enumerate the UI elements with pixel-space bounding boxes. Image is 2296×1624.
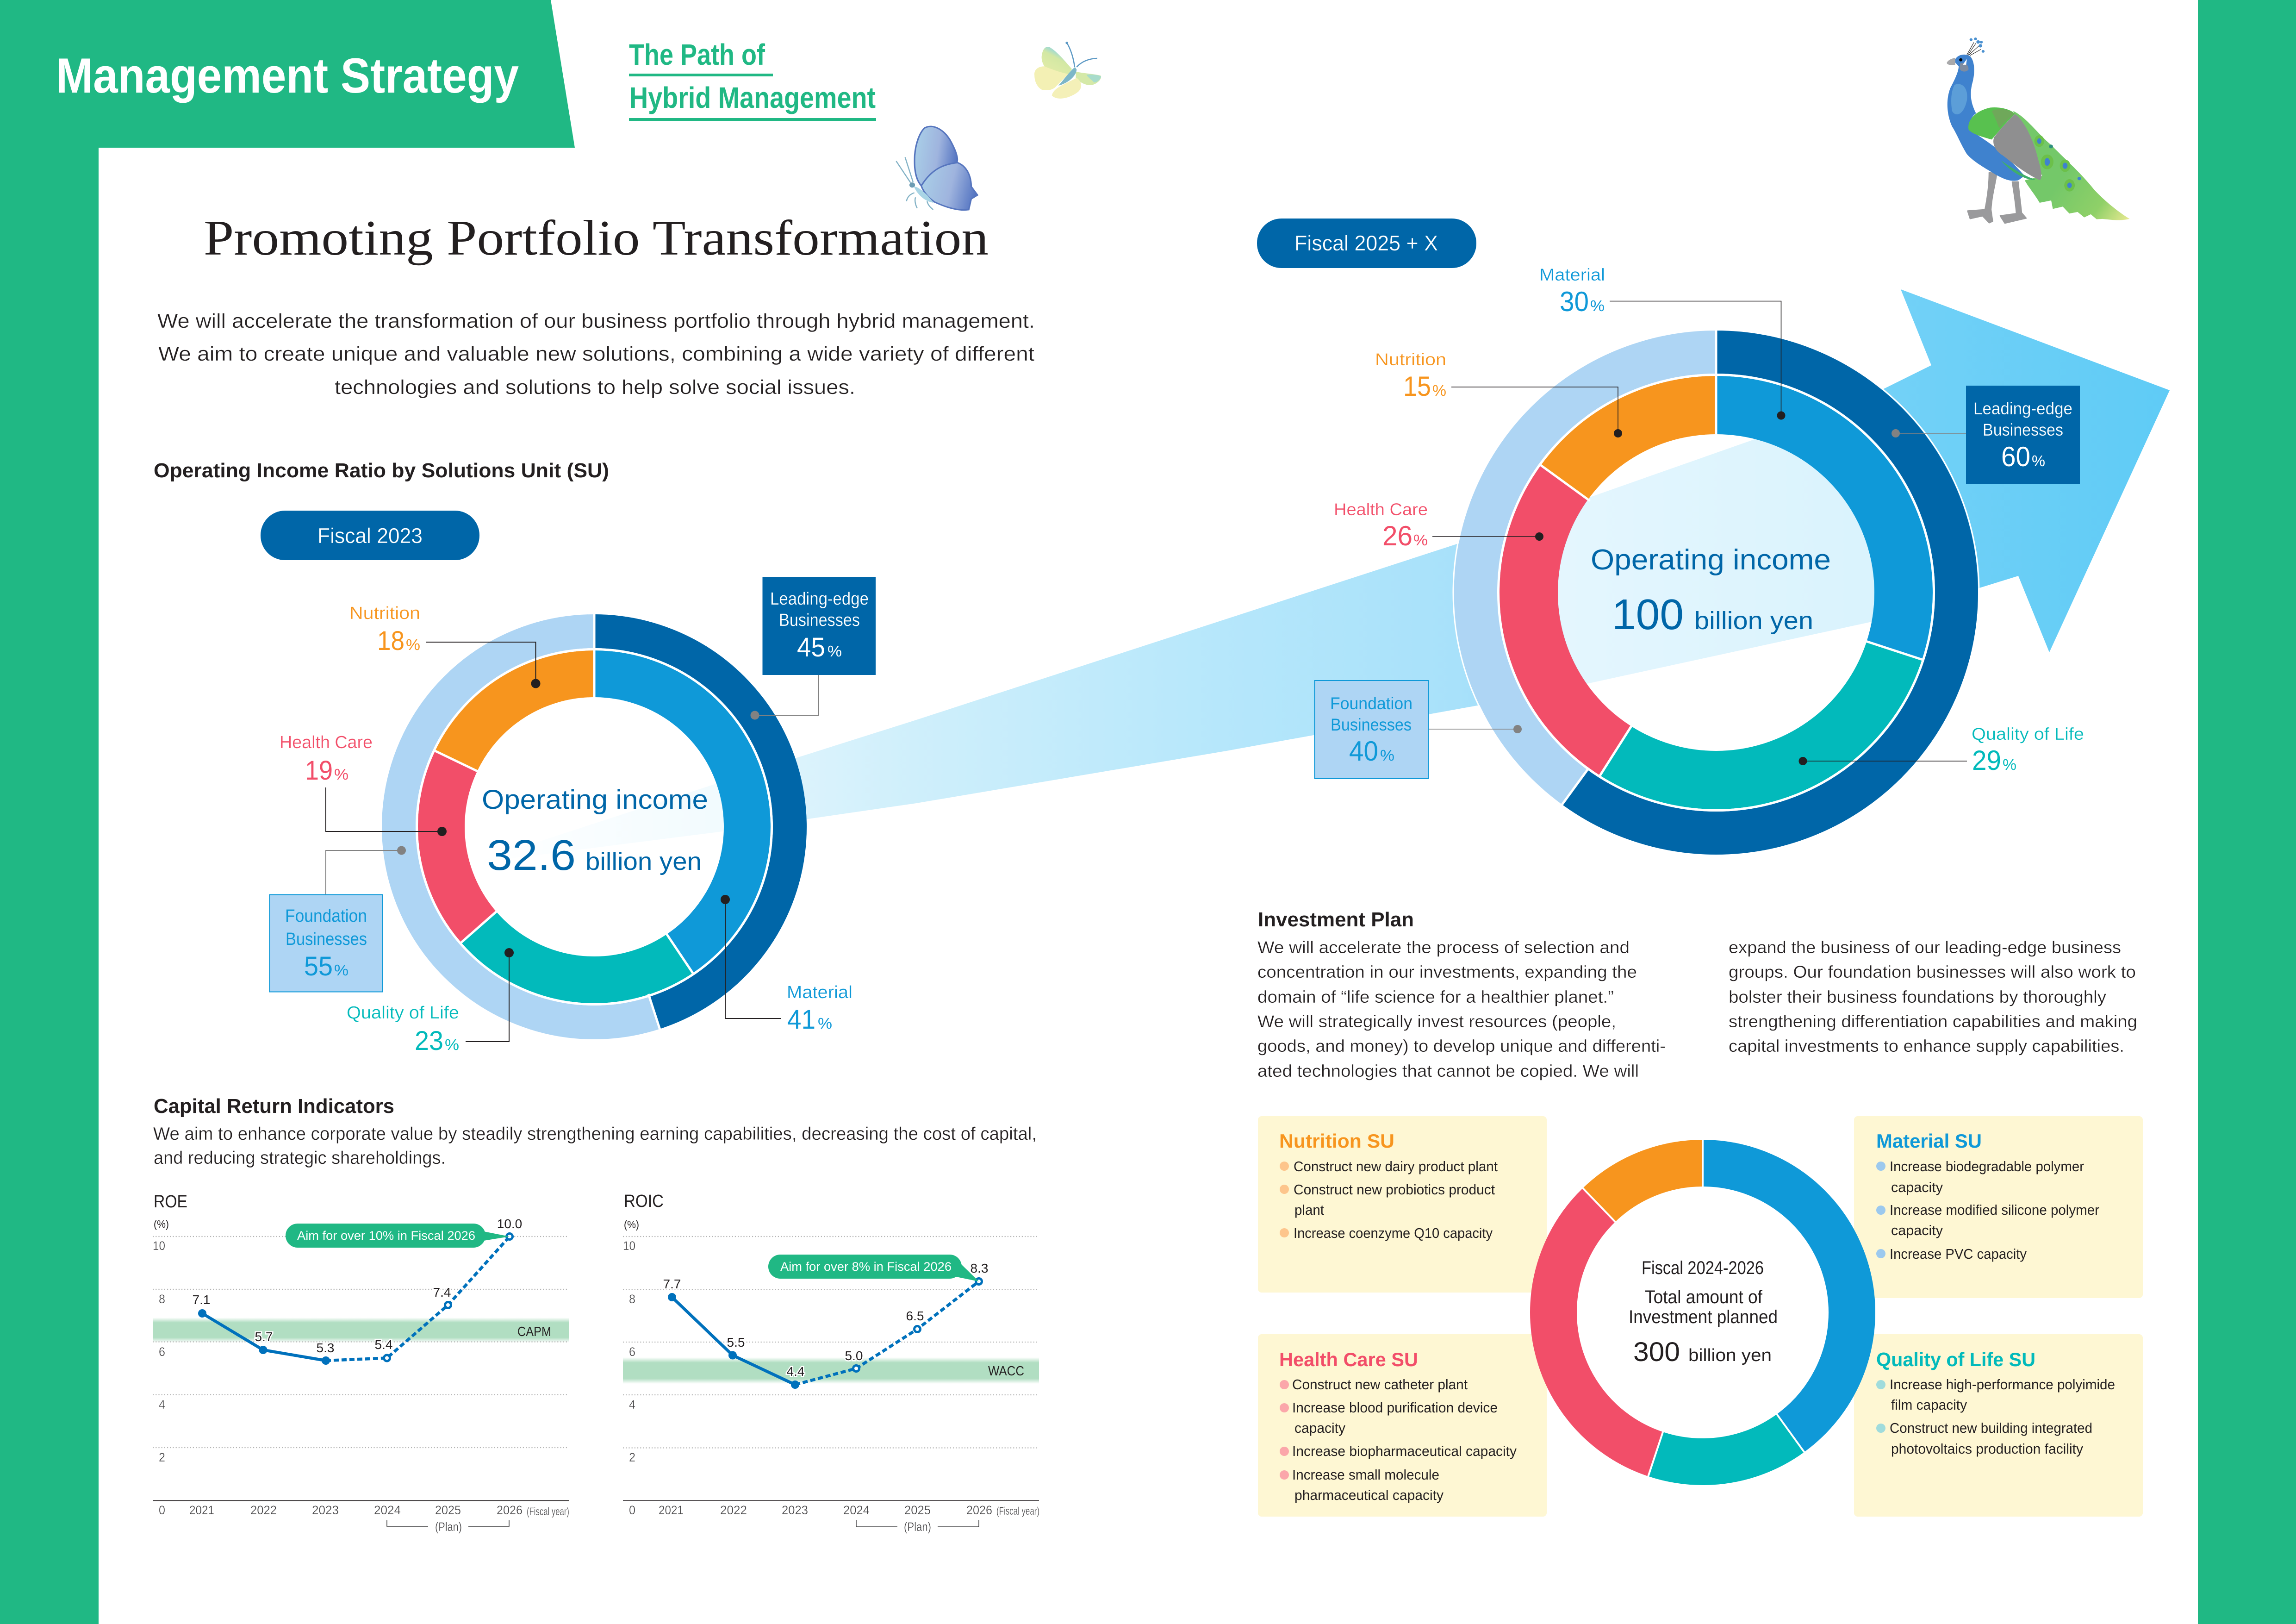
- label: material 41%: %: [818, 1015, 832, 1032]
- illustration: blue butterfly: [896, 126, 977, 210]
- label: health care 19%: [280, 733, 447, 836]
- label: nutrition 18%: %: [406, 636, 420, 653]
- panel: health care SU: Health Care SU: [1279, 1349, 1418, 1370]
- chart: ROIC: 10: [623, 1239, 635, 1253]
- donut centre: 32.6 billion yen: Operating income: [482, 785, 708, 815]
- label: leading-edge businesses 60%: Leading-edge: [1973, 399, 2072, 418]
- chart: ROIC: 8.3: [971, 1261, 988, 1275]
- label: leading-edge businesses 60%: [1892, 386, 2080, 484]
- donut centre: 32.6 billion yen: 32.6: [487, 831, 576, 879]
- label: material 41%: [721, 895, 852, 1035]
- label: health care 26%: 26: [1382, 520, 1412, 551]
- chart: ROE: ROE: [154, 1192, 187, 1212]
- chart: ROIC: 2022: [720, 1503, 747, 1517]
- section tag: The Path of Hybrid Management: The Path of: [629, 38, 765, 71]
- panel: quality of life SU: Increase high-performance polyimide: [1890, 1376, 2115, 1393]
- label: leading-edge businesses 60%: %: [2032, 452, 2045, 469]
- panel: health care SU: [1258, 1334, 1547, 1517]
- panel: nutrition SU: [1258, 1116, 1547, 1293]
- panel: health care SU: capacity: [1294, 1420, 1345, 1436]
- label: quality of life 23%: 23: [415, 1026, 443, 1056]
- title: Promoting Portfolio Transformation: [204, 211, 989, 266]
- heading: capital return indicators: [153, 1095, 1037, 1168]
- intro text: We will accelerate the transformation of our business portfolio through hybrid management.: [157, 310, 1035, 332]
- callout: ROE target: [286, 1224, 510, 1248]
- label: leading-edge businesses 60%: Businesses: [1983, 420, 2063, 439]
- outer ring: leading-edge and foundation: [1475, 352, 1957, 833]
- label: nutrition 15%: 15: [1403, 371, 1431, 402]
- label: material 30%: [1539, 265, 1786, 419]
- section tag: The Path of Hybrid Management: Hybrid Management: [629, 81, 876, 114]
- donut centre: 300 billion yen: [1629, 1258, 1778, 1367]
- investment plan text: left column: ated technologies that cannot be copied. We will: [1257, 1062, 1639, 1081]
- donut centre: 100 billion yen: Operating income: [1591, 544, 1831, 576]
- chart: ROIC: 8: [629, 1292, 635, 1306]
- chart: ROE: (Fiscal year): [527, 1505, 569, 1518]
- label: nutrition 15%: Nutrition: [1375, 350, 1446, 369]
- capital return description: We aim to enhance corporate value by steadily strengthening earning capabilities, decreasing the cost of capital,: [153, 1124, 1037, 1144]
- chart: ROIC: 2023: [782, 1503, 808, 1517]
- label: quality of life 23%: [347, 948, 514, 1056]
- header banner: [0, 0, 575, 148]
- chart: ROE: 8: [159, 1292, 165, 1306]
- label: health care 19%: %: [334, 766, 348, 783]
- label: material 30%: 30: [1560, 286, 1589, 317]
- investment plan text: right column: groups. Our foundation businesses will also work to: [1729, 962, 2136, 981]
- chart: ROIC: 6.5: [906, 1309, 924, 1323]
- intro text: We aim to create unique and valuable new solutions, combining a wide variety of different: [158, 343, 1034, 365]
- investment plan text: right column: expand the business of our leading-edge business: [1729, 938, 2121, 957]
- investment plan text: right column: bolster their business foundations by thoroughly: [1729, 987, 2107, 1006]
- donut centre: 300 billion yen: Total amount of: [1645, 1287, 1763, 1307]
- label: leading-edge businesses 45%: [751, 577, 876, 719]
- label: foundation businesses 40%: Foundation: [1330, 694, 1412, 713]
- label: foundation businesses 55%: Businesses: [286, 930, 367, 949]
- chart: ROE: 7.1: [193, 1293, 210, 1307]
- donut chart: investment plan: [1530, 1139, 1875, 1485]
- donut centre: 100 billion yen: [1591, 544, 1831, 638]
- chart: ROIC: 2024: [843, 1503, 870, 1517]
- investment plan text: left column: goods, and money) to develop unique and differenti-: [1257, 1037, 1666, 1056]
- donut centre: 300 billion yen: Fiscal 2024-2026: [1642, 1258, 1764, 1278]
- donut chart: fiscal 2025 + X: [1453, 330, 1979, 856]
- chart: ROE: 2025: [435, 1503, 461, 1517]
- label: foundation businesses 40%: Businesses: [1331, 715, 1412, 734]
- chart: ROE: 2: [159, 1450, 165, 1464]
- investment plan text: left column: concentration in our investments, expanding the: [1257, 962, 1637, 981]
- investment plan text: left column: domain of “life science for a healthier planet.”: [1257, 987, 1614, 1006]
- panel: health care SU: Increase blood purification device: [1292, 1399, 1498, 1416]
- label: health care 26%: [1334, 500, 1543, 551]
- panel: material SU: [1854, 1116, 2143, 1298]
- label: quality of life 23%: Quality of Life: [347, 1003, 459, 1023]
- chart: ROIC: WACC: [988, 1364, 1024, 1379]
- label: material 41%: Material: [787, 983, 852, 1002]
- donut centre: 300 billion yen: Investment planned: [1629, 1307, 1778, 1327]
- panel: nutrition SU: plant: [1294, 1202, 1324, 1218]
- panel: nutrition SU: Nutrition SU: [1279, 1130, 1394, 1152]
- panel: material SU: Increase PVC capacity: [1890, 1246, 2027, 1262]
- chart: ROE: (Plan): [435, 1520, 462, 1534]
- chart: ROE: (%): [154, 1218, 169, 1230]
- inner ring: solutions units: [1529, 405, 1904, 780]
- chart: ROIC: 2021: [659, 1503, 684, 1517]
- illustration: yellow butterfly: [1034, 42, 1101, 99]
- investment plan text: right column: capital investments to enhance supply capabilities.: [1729, 1037, 2124, 1056]
- label: foundation businesses 40%: %: [1380, 747, 1394, 764]
- chart: ROE: 2021: [189, 1503, 214, 1517]
- chart: ROE: 6: [159, 1345, 165, 1359]
- donut chart: fiscal 2023: [399, 614, 790, 1030]
- chart: ROIC: (%): [624, 1218, 639, 1230]
- label: material 30%: Material: [1539, 265, 1605, 284]
- label: nutrition 18%: Nutrition: [349, 604, 420, 623]
- label: material 41%: 41: [787, 1005, 815, 1035]
- big arrow: [472, 289, 2170, 863]
- panel: health care SU: Construct new catheter plant: [1292, 1376, 1468, 1393]
- inner ring: solutions units: [442, 674, 747, 980]
- chart: ROIC: 0: [629, 1503, 635, 1517]
- chart: ROIC: 2: [629, 1450, 635, 1464]
- pill: Fiscal 2025 + X: Fiscal 2025 + X: [1294, 231, 1438, 255]
- label: nutrition 15%: [1375, 350, 1622, 437]
- intro text: technologies and solutions to help solve social issues.: [335, 376, 855, 399]
- panel: quality of life SU: [1854, 1334, 2143, 1517]
- label: leading-edge businesses 45%: 45: [797, 632, 825, 662]
- chart: ROE: 2024: [374, 1503, 401, 1517]
- panel: material SU: capacity: [1891, 1222, 1943, 1238]
- panel: nutrition SU: Construct new probiotics product: [1294, 1181, 1495, 1198]
- chart: ROIC: [623, 1192, 1039, 1534]
- chart: ROE: 2026: [497, 1503, 523, 1517]
- chart: ROE: 2022: [250, 1503, 277, 1517]
- investment plan text: right column: strengthening differentiation capabilities and making: [1729, 1012, 2137, 1031]
- label: leading-edge businesses 45%: %: [828, 643, 842, 660]
- heading: capital return indicators: Capital Return Indicators: [154, 1095, 394, 1118]
- section tag: The Path of Hybrid Management: [629, 38, 876, 121]
- investment plan text: left column: We will accelerate the process of selection and: [1257, 938, 1630, 957]
- label: leading-edge businesses 60%: 60: [2001, 441, 2030, 472]
- chart: ROE: CAPM: [517, 1324, 551, 1339]
- chart: ROIC: 6: [629, 1345, 635, 1359]
- capital return description: and reducing strategic shareholdings.: [154, 1148, 446, 1168]
- label: health care 26%: %: [1413, 531, 1428, 549]
- investment plan text: left column: We will strategically invest resources (people,: [1257, 1012, 1616, 1031]
- label: quality of life 29%: [1798, 725, 2084, 776]
- chart: ROIC: (Plan): [904, 1520, 931, 1534]
- pill: Fiscal 2025 + X: [1257, 219, 1476, 268]
- label: quality of life 29%: Quality of Life: [1972, 725, 2084, 743]
- label: quality of life 23%: %: [445, 1036, 459, 1053]
- chart: ROE: 2023: [312, 1503, 339, 1517]
- label: leading-edge businesses 45%: Leading-edge: [770, 589, 869, 609]
- chart: ROIC: 5.5: [727, 1335, 745, 1349]
- label: leading-edge businesses 45%: Businesses: [779, 611, 860, 630]
- illustration: peacock: [1947, 37, 2130, 223]
- panel: nutrition SU: Increase coenzyme Q10 capacity: [1294, 1225, 1493, 1241]
- chart: ROE: 0: [159, 1503, 165, 1517]
- chart: ROIC: 5.0: [845, 1349, 863, 1363]
- label: foundation businesses 55%: %: [334, 962, 348, 979]
- donut centre: 300 billion yen: billion yen: [1688, 1346, 1772, 1365]
- donut centre: 100 billion yen: 100: [1612, 590, 1684, 638]
- label: nutrition 18%: 18: [377, 626, 404, 656]
- capital return description: [153, 1124, 1037, 1168]
- label: foundation businesses 55%: Foundation: [285, 906, 367, 926]
- panel: quality of life SU: film capacity: [1891, 1397, 1967, 1413]
- pill: Fiscal 2023: [261, 511, 479, 560]
- label: nutrition 15%: %: [1432, 382, 1446, 399]
- heading: investment plan: Investment Plan: [1258, 908, 1414, 931]
- investment plan text: right column: [1729, 938, 2137, 1056]
- panel: health care SU: Increase small molecule: [1292, 1467, 1439, 1483]
- chart: ROE: [153, 1192, 569, 1534]
- label: health care 19%: 19: [305, 756, 333, 786]
- chart: ROIC: 4.4: [787, 1364, 804, 1379]
- panel: material SU: Increase modified silicone polymer: [1890, 1202, 2099, 1218]
- label: health care 26%: Health Care: [1334, 500, 1428, 519]
- chart: ROE: 10: [153, 1239, 165, 1253]
- label: health care 19%: Health Care: [280, 733, 373, 752]
- chart: ROIC: (Fiscal year): [996, 1505, 1039, 1518]
- chart: ROIC: ROIC: [624, 1192, 664, 1211]
- intro text: [157, 310, 1035, 399]
- donut centre: 300 billion yen: 300: [1633, 1337, 1680, 1367]
- chart: ROIC: 7.7: [663, 1277, 681, 1291]
- header banner: Management Strategy: [56, 48, 519, 103]
- panel: health care SU: Increase biopharmaceutical capacity: [1292, 1443, 1517, 1459]
- label: foundation businesses 55%: [269, 846, 406, 992]
- chart: ROE: 10.0: [497, 1217, 522, 1231]
- chart: ROE: 5.7: [255, 1330, 273, 1344]
- callout: ROIC target: Aim for over 8% in Fiscal 2026: [780, 1260, 952, 1274]
- panel: quality of life SU: photovoltaics production facility: [1891, 1441, 2083, 1457]
- investment plan text: left column: [1257, 938, 1666, 1081]
- outer ring: leading-edge and foundation: [399, 631, 790, 1022]
- label: material 30%: %: [1590, 297, 1605, 314]
- panel: nutrition SU: Construct new dairy product plant: [1294, 1158, 1498, 1174]
- panel: health care SU: pharmaceutical capacity: [1294, 1487, 1444, 1503]
- chart: ROIC: 4: [629, 1398, 635, 1412]
- panel: quality of life SU: Construct new building integrated: [1890, 1420, 2092, 1436]
- donut centre: 32.6 billion yen: billion yen: [585, 848, 702, 875]
- donut centre: 100 billion yen: billion yen: [1694, 607, 1813, 635]
- label: quality of life 29%: %: [2003, 756, 2016, 773]
- panel: quality of life SU: Quality of Life SU: [1876, 1349, 2035, 1370]
- label: quality of life 29%: 29: [1972, 745, 2001, 776]
- callout: ROE target: Aim for over 10% in Fiscal 2026: [297, 1229, 475, 1243]
- label: foundation businesses 40%: 40: [1349, 736, 1378, 767]
- heading: operating income ratio: Operating Income Ratio by Solutions Unit (SU): [154, 459, 609, 482]
- panel: material SU: Increase biodegradable polymer: [1890, 1158, 2084, 1174]
- panel: material SU: Material SU: [1876, 1130, 1982, 1152]
- donut centre: 32.6 billion yen: [482, 785, 708, 879]
- label: foundation businesses 55%: 55: [304, 951, 333, 981]
- panel: material SU: capacity: [1891, 1179, 1943, 1195]
- chart: ROIC: 2025: [904, 1503, 931, 1517]
- label: nutrition 18%: [349, 604, 541, 688]
- chart: ROE: 7.4: [433, 1285, 451, 1299]
- chart: ROIC: 2026: [966, 1503, 992, 1517]
- label: foundation businesses 40%: [1314, 681, 1522, 779]
- chart: ROE: 5.4: [375, 1337, 392, 1352]
- pill: Fiscal 2023: Fiscal 2023: [317, 524, 423, 548]
- callout: ROIC target: [768, 1255, 979, 1281]
- chart: ROE: 4: [159, 1398, 165, 1412]
- chart: ROE: 5.3: [317, 1341, 334, 1355]
